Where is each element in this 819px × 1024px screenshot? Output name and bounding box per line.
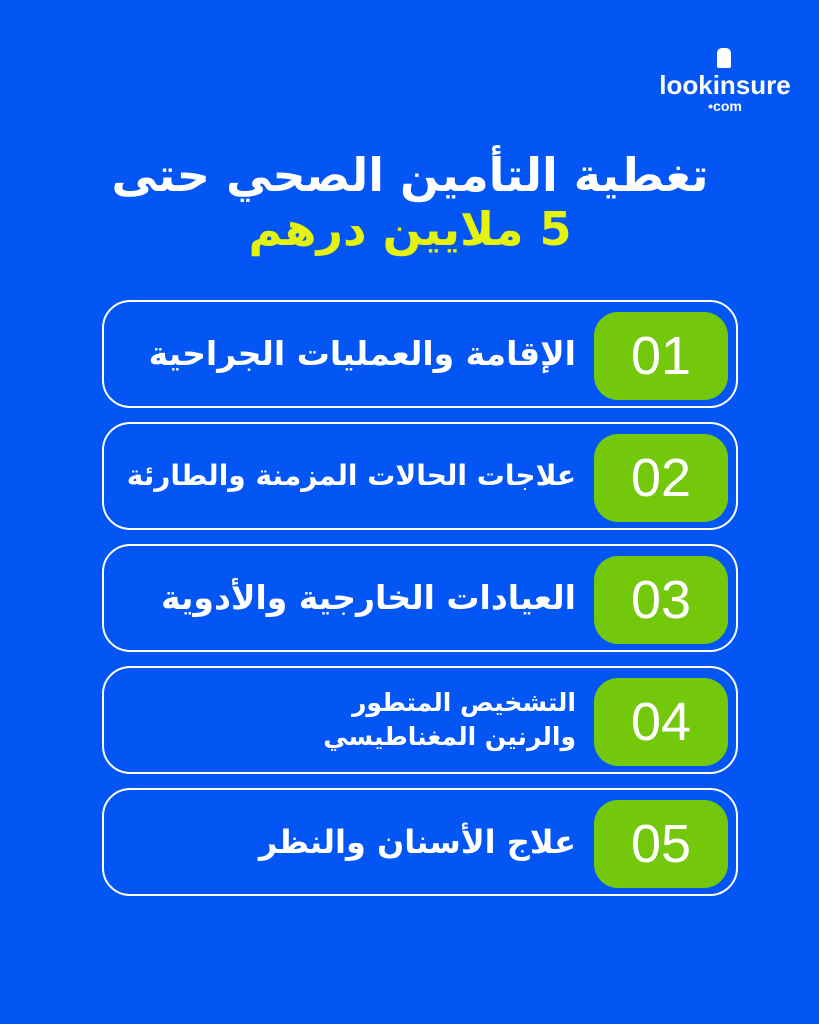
item 03: العيادات الخارجية والأدوية	[161, 578, 576, 617]
item 02: 02	[631, 448, 691, 508]
title: تغطية التأمين الصحي حتى	[111, 148, 709, 202]
item 05: علاج الأسنان والنظر	[259, 823, 576, 861]
item 01	[102, 300, 738, 408]
item 04: التشخيص المتطور	[352, 688, 576, 717]
logo: lookinsure	[659, 70, 791, 100]
logo: •com	[708, 98, 742, 114]
title: 5 ملايين درهم	[249, 202, 571, 256]
item 04	[102, 666, 738, 774]
item 05: 05	[631, 814, 691, 874]
item 02: علاجات الحالات المزمنة والطارئة	[127, 459, 576, 492]
title	[111, 145, 709, 256]
item 02	[102, 422, 738, 530]
item 05	[102, 788, 738, 896]
item 03	[102, 544, 738, 652]
item 03: 03	[631, 570, 691, 630]
item 04: 04	[631, 692, 691, 752]
logo	[659, 48, 791, 114]
item 01: 01	[631, 326, 691, 386]
item 01: الإقامة والعمليات الجراحية	[149, 334, 576, 373]
item 04: والرنين المغناطيسي	[323, 722, 576, 751]
